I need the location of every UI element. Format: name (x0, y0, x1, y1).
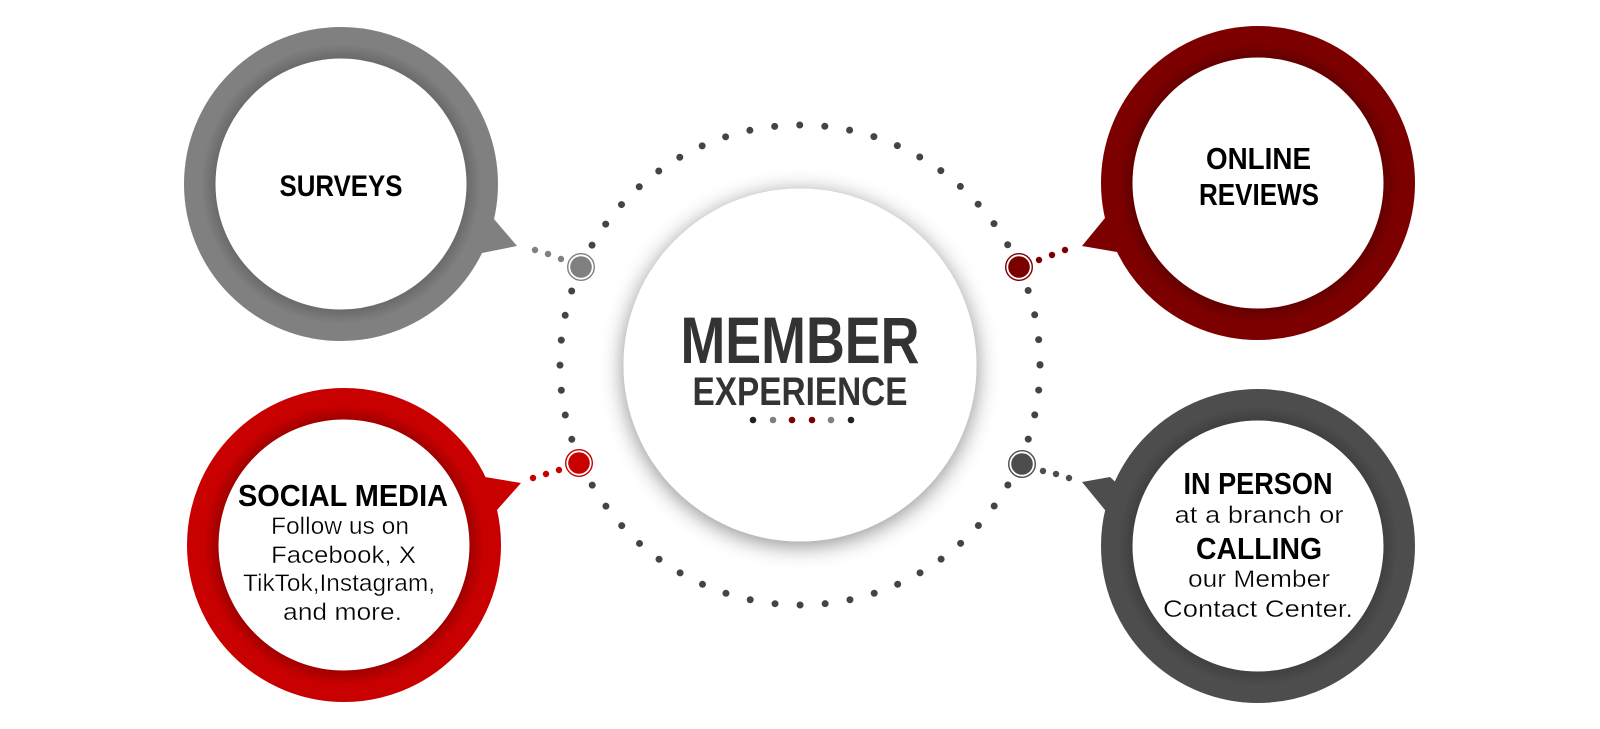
panel: surveys (200, 43, 517, 325)
heading: member: MEMBER (680, 303, 920, 377)
node and connector: online reviews (1003, 247, 1068, 283)
panel: social media (203, 404, 521, 686)
label: social media: Follow us on (271, 513, 409, 540)
label: online reviews (1199, 141, 1319, 212)
label: social media: and more. (283, 599, 402, 626)
panel: in person or calling (1082, 405, 1399, 687)
label: in person or calling: Contact Center. (1163, 596, 1353, 623)
dotted ring (560, 125, 1040, 605)
label: social media (238, 478, 448, 626)
node and connector: in person (1006, 448, 1072, 481)
label: in person or calling: IN PERSON (1184, 466, 1332, 501)
label: online reviews: REVIEWS (1199, 177, 1319, 212)
center circle: member experience (624, 188, 976, 542)
label: surveys: SURVEYS (280, 170, 402, 203)
label: in person or calling: CALLING (1196, 531, 1322, 566)
center accent dots (750, 417, 854, 423)
panel: online reviews (1082, 42, 1399, 324)
label: social media: SOCIAL MEDIA (238, 478, 448, 513)
label: social media: Facebook, X (271, 542, 416, 569)
label: in person or calling: at a branch or (1174, 502, 1344, 529)
label: in person or calling (1163, 466, 1353, 623)
label: in person or calling: our Member (1188, 566, 1330, 593)
heading: experience: EXPERIENCE (692, 370, 908, 414)
label: online reviews: ONLINE (1206, 141, 1311, 176)
label: social media: TikTok,Instagram, (243, 570, 435, 597)
node and connector: surveys (532, 247, 597, 283)
node and connector: social media (530, 447, 595, 481)
